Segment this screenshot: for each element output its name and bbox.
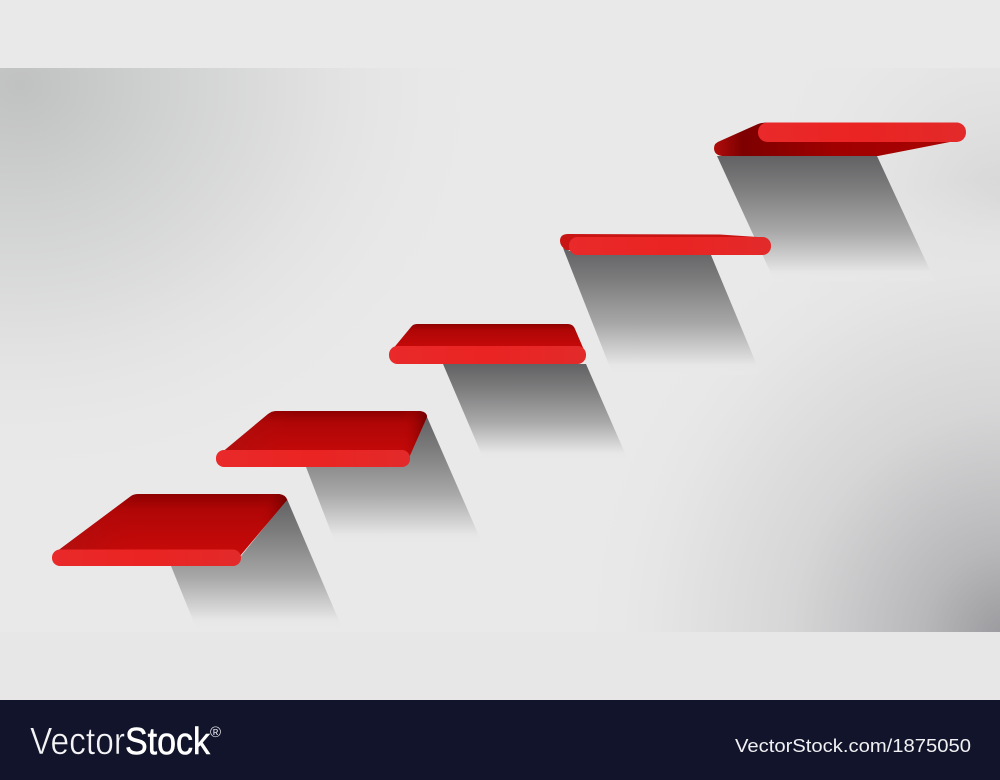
footer logo: VectorStock: ® [210,724,221,741]
footer logo: VectorStock: Vector [30,719,125,762]
background: lower band [0,632,1000,700]
footer logo: VectorStock [30,719,221,762]
step 5 shadow [717,156,935,282]
step 1 front edge [52,550,241,566]
footer bar [0,700,1000,780]
step 4 back face [560,234,765,250]
step 1 shadow [171,499,343,630]
step 3 [389,324,628,460]
step 2 shadow [306,417,483,545]
step 1 top face [56,494,287,556]
step 3 shadow [443,364,628,460]
step 5 front edge [758,122,966,142]
step 2 front edge [216,450,410,467]
step 2 top face [220,411,427,460]
background: main wall with gradient corners [0,68,1000,632]
step 4 front edge [569,237,771,255]
step 5 [714,122,966,282]
step 1 [52,494,343,630]
step 5 dark underside [714,122,955,156]
footer logo: VectorStock: Stock [125,719,211,762]
background: top band [0,0,1000,68]
footer image id: VectorStock.com/1875050 [735,735,971,756]
step 4 [560,234,771,375]
step 4 shadow [563,248,761,375]
step 2 [216,411,483,545]
step 3 front edge [389,346,586,364]
step 3 top face [392,324,584,350]
